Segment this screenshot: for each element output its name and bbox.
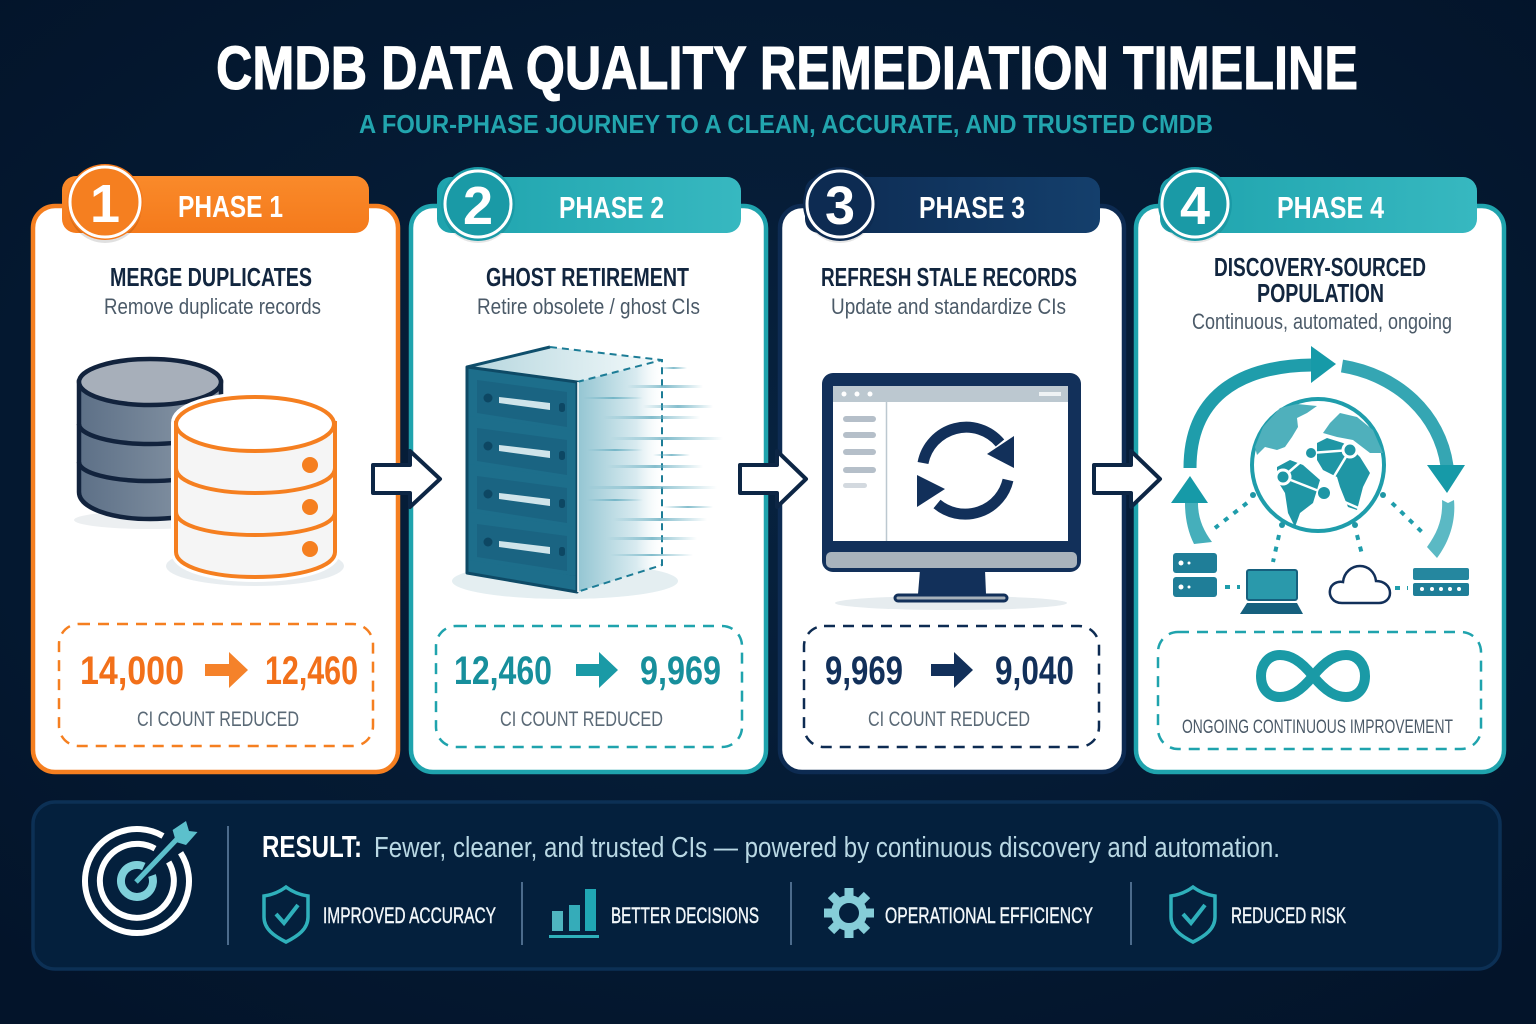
benefit: operational efficiency	[824, 888, 1093, 938]
phase 2 description: Retire obsolete / ghost CIs	[477, 294, 700, 319]
arrow: phase 2 to 3	[740, 451, 806, 507]
phase 1 metric box: 14,000	[80, 649, 184, 693]
phase 3 number badge	[803, 167, 877, 243]
card 2 background	[411, 206, 766, 772]
result background	[33, 802, 1500, 969]
phase 4 heading: POPULATION	[1257, 278, 1384, 308]
subtitle: A FOUR-PHASE JOURNEY TO A CLEAN, ACCURATE, AND TRUSTED CMDB	[359, 109, 1213, 139]
icon: database duplicates	[74, 359, 344, 586]
arrow: phase 1 to 2	[373, 451, 440, 507]
phase 4 label: PHASE 4	[1277, 190, 1385, 225]
card 4 background	[1136, 206, 1504, 772]
phase 1 number badge	[67, 164, 143, 243]
phase 1 heading: MERGE DUPLICATES	[110, 262, 312, 292]
benefit: operational efficiency: OPERATIONAL EFFICIENCY	[885, 903, 1093, 928]
phase 4 tab	[1160, 177, 1477, 233]
phase 2 metric box: 12,460	[454, 649, 552, 693]
phase 2 tab	[437, 177, 741, 233]
result statement: RESULT:	[262, 829, 362, 864]
benefit: improved accuracy	[264, 887, 496, 942]
phase 3 number badge: 3	[825, 176, 855, 236]
panel: phase 2	[411, 167, 766, 772]
divider	[227, 826, 229, 945]
benefit: reduced risk: REDUCED RISK	[1231, 903, 1346, 928]
arrow: phase 3 to 4	[1094, 451, 1160, 507]
phase 4 number badge: 4	[1180, 176, 1210, 236]
panel: phase 1	[33, 164, 398, 772]
phase 3 description: Update and standardize CIs	[831, 294, 1066, 319]
phase 3 metric box: 9,969	[825, 649, 903, 693]
phase 1 metric box: 12,460	[265, 649, 358, 693]
benefit: better decisions	[549, 889, 759, 938]
phase 3 metric box: 9,040	[995, 649, 1074, 693]
benefit: reduced risk	[1171, 887, 1346, 942]
phase 2 metric box: 9,969	[640, 649, 721, 693]
phase 2 metric box	[436, 626, 742, 747]
phase 2 heading: GHOST RETIREMENT	[486, 262, 689, 292]
icon: monitor with refresh	[822, 373, 1081, 610]
result statement	[262, 829, 1280, 864]
icon: discovery cycle with globe	[1171, 346, 1469, 614]
panel: result	[33, 802, 1500, 969]
phase 1 description: Remove duplicate records	[104, 294, 321, 319]
phase 1 metric box	[59, 624, 373, 746]
phase 3 metric box	[804, 626, 1099, 747]
phase 4 continuous improvement box	[1158, 632, 1481, 749]
phase 4 heading	[1214, 252, 1426, 308]
phase 4 description: Continuous, automated, ongoing	[1192, 309, 1452, 334]
icon: fading ghost server	[452, 347, 723, 599]
benefit: improved accuracy: IMPROVED ACCURACY	[323, 903, 496, 928]
phase 3 label: PHASE 3	[919, 190, 1025, 225]
phase 1 tab	[62, 176, 369, 233]
phase 1 metric box: CI COUNT REDUCED	[137, 708, 299, 731]
phase 2 number badge: 2	[463, 176, 493, 236]
panel: phase 4	[1136, 167, 1504, 772]
result statement: Fewer, cleaner, and trusted CIs — powered by continuous discovery and automation.	[374, 832, 1280, 864]
icon: target with arrow	[85, 821, 198, 933]
phase 2 label: PHASE 2	[559, 190, 664, 225]
phase 2 number badge	[441, 167, 515, 243]
phase 4 number badge	[1158, 167, 1232, 243]
phase 3 tab	[805, 177, 1100, 233]
phase 2 metric box: CI COUNT REDUCED	[500, 708, 663, 731]
panel: phase 3	[780, 167, 1124, 772]
phase 4 heading: DISCOVERY-SOURCED	[1214, 252, 1426, 282]
benefit: better decisions: BETTER DECISIONS	[611, 903, 759, 928]
phase 1 label: PHASE 1	[178, 189, 283, 224]
card 1 background	[33, 206, 398, 772]
phase 3 metric box: CI COUNT REDUCED	[868, 708, 1030, 731]
card 3 background	[780, 206, 1124, 772]
phase 1 number badge: 1	[90, 174, 120, 234]
phase 3 heading: REFRESH STALE RECORDS	[821, 262, 1077, 292]
